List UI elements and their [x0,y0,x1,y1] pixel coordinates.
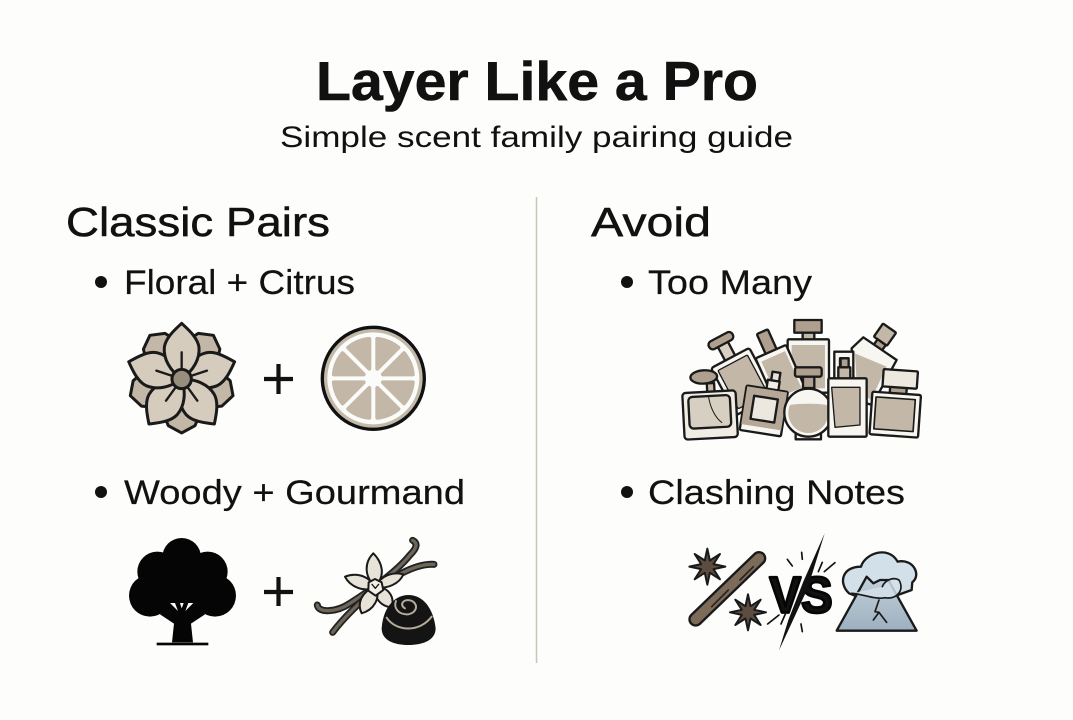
icon: cinnamon stick [696,558,759,619]
icon: star anise top [689,549,725,585]
icon: flower [123,323,240,434]
list item: woody + gourmand: Woody + Gourmand [124,474,465,512]
icon: tree [129,538,236,645]
panel: avoid [591,199,923,650]
title: Layer Like a Pro [316,50,758,112]
subtitle: Simple scent family pairing guide [280,121,793,154]
list item: too many: Too Many [648,264,812,302]
list item: floral + citrus: Floral + Citrus [124,264,355,302]
icon: citrus slice [322,327,424,429]
icon: vanilla flower and chocolate [317,540,436,645]
icon: plus sign (woody + gourmand) [264,577,293,606]
lightning slash [779,533,825,650]
icon: stormy mountain [837,552,917,631]
icon: cinnamon and star anise versus storm [689,533,917,650]
icon: star anise bottom [730,594,766,630]
heading: avoid: Avoid [591,199,711,245]
icon: pile of perfume bottles [681,320,923,440]
heading: classic pairs: Classic Pairs [66,199,330,245]
list item: clashing notes: Clashing Notes [648,474,905,512]
panel: classic pairs [66,199,465,645]
icon: plus sign (floral + citrus) [264,364,293,394]
VS label: VS [769,566,833,623]
